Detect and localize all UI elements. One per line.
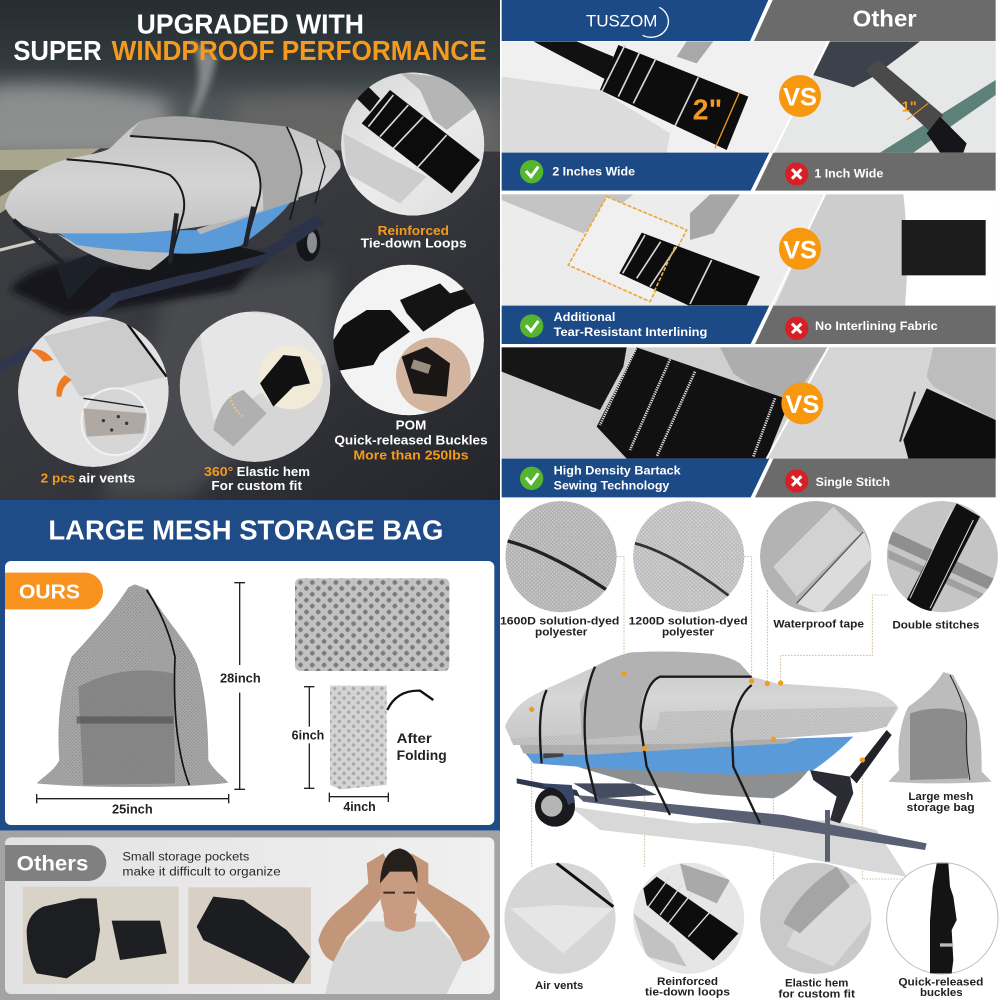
row 3 captions: Single Stitch [816, 475, 890, 489]
white diagonal dividers [767, 41, 828, 459]
caption: elastic hem: For custom fit [211, 479, 303, 493]
title: WINDPROOF PERFORMANCE [112, 35, 487, 66]
shadow and boat on trailer [505, 652, 927, 877]
caption: elastic hem: Elastic hem [237, 465, 310, 479]
caption: 1600D polyester: polyester [535, 627, 588, 639]
frustrated man [318, 848, 490, 994]
caption: tie-down loops: Tie-down Loops [361, 236, 467, 250]
panel: others [5, 837, 494, 994]
others note: make it difficult to organize [122, 865, 281, 879]
dimension: height 28inch [220, 583, 261, 789]
caption: tie-down loops: Reinforced [378, 224, 449, 238]
vs badge 2: VS [783, 236, 817, 264]
row 2 captions [502, 306, 996, 344]
caption: tie-down loops [645, 976, 730, 999]
caption: elastic hem [204, 465, 310, 493]
comparison header: TUSZOM [586, 12, 657, 31]
caption: waterproof tape: Waterproof tape [773, 618, 864, 630]
gray background [0, 831, 500, 1000]
caption: elastic hem: for custom fit [778, 988, 855, 1000]
caption: elastic hem [778, 978, 855, 1000]
detail: 1600D polyester [503, 501, 617, 612]
caption: tie-down loops: tie-down loops [645, 987, 730, 999]
caption: 1200D polyester [629, 615, 748, 639]
others tab: Others [17, 852, 88, 876]
dimension: height 6inch: 6inch [292, 728, 324, 742]
caption: double stitches: Double stitches [892, 620, 979, 632]
row 2 captions: Additional [554, 310, 615, 324]
row 1 captions [502, 153, 996, 191]
caption: air vents: Air vents [535, 980, 583, 992]
boat on trailer [0, 116, 341, 372]
vs badge 1 [779, 75, 821, 117]
title [13, 8, 487, 66]
caption: air vents: 2 pcs [41, 471, 75, 485]
leader lines [532, 557, 903, 880]
caption: tie-down loops: Reinforced [657, 976, 718, 988]
after folding note: Folding [397, 747, 447, 763]
caption: 1600D polyester: 1600D solution-dyed [500, 615, 619, 627]
dimension: width 25inch: 25inch [112, 802, 153, 816]
vs badge 3: VS [785, 391, 819, 419]
dimension: width 4inch: 4inch [343, 800, 376, 814]
photo: rolled cover [188, 887, 311, 984]
detail: buckles [333, 265, 484, 415]
row 1: strap width: 2" [693, 94, 722, 126]
row 2 captions: No Interlining Fabric [815, 319, 938, 333]
detail: tie-down loops [341, 72, 487, 216]
folded pouch [330, 686, 433, 789]
blue background [0, 500, 500, 831]
vs badge 2 [779, 228, 821, 270]
comparison header [502, 0, 996, 41]
row 1 captions: 1 Inch Wide [814, 167, 883, 181]
vs badge 1: VS [783, 84, 817, 112]
caption: elastic hem: Elastic hem [785, 978, 848, 990]
panel: product features [500, 501, 998, 1000]
row 3 captions: Sewing Technology [554, 479, 669, 493]
caption: 1200D polyester: polyester [662, 627, 715, 639]
mesh close-up [295, 578, 449, 671]
caption: mesh bag: storage bag [907, 802, 975, 814]
background: stormy sky and road [0, 0, 500, 500]
detail: air vents [504, 863, 616, 974]
comparison header: Other [853, 6, 917, 32]
caption: buckles: Quick-released Buckles [334, 433, 488, 447]
caption: quick-released buckles [898, 977, 983, 999]
others note: Small storage pockets [122, 850, 249, 864]
dimension: width 25inch [37, 794, 229, 816]
panel: comparison with other [502, 0, 996, 498]
dimension: width 4inch [329, 793, 388, 814]
vs badge 3 [781, 382, 823, 424]
caption: air vents: air vents [79, 471, 135, 485]
panel: ours [5, 561, 494, 825]
detail: elastic hem [760, 863, 872, 974]
photo: small pouches [23, 887, 179, 984]
row 3 captions [502, 459, 996, 497]
row 1: strap width [502, 41, 996, 153]
after folding note [397, 730, 447, 763]
caption: tie-down loops [361, 224, 467, 250]
detail: air vents [18, 316, 169, 467]
row 1 captions: 2 Inches Wide [552, 165, 635, 179]
caption: air vents [41, 471, 135, 485]
caption: buckles [334, 418, 488, 462]
title: UPGRADED WITH [137, 8, 364, 39]
row 1: strap width: 1" [902, 100, 917, 116]
caption: buckles: POM [396, 418, 426, 432]
dimension: height 6inch [292, 687, 324, 788]
caption: elastic hem: 360° [204, 465, 233, 479]
ours tab: OURS [19, 580, 80, 603]
after folding note: After [397, 730, 432, 746]
row 2: interlining [502, 194, 996, 306]
caption: buckles: More than 250lbs [353, 448, 469, 462]
mesh bag [888, 672, 992, 783]
detail: quick-released buckles [887, 863, 998, 974]
title: LARGE MESH STORAGE BAG [48, 514, 443, 545]
others note [122, 850, 281, 879]
caption: 1600D polyester [500, 615, 619, 639]
caption: mesh bag: Large mesh [908, 791, 973, 803]
dimension: height 28inch: 28inch [220, 672, 261, 686]
row 3 captions: High Density Bartack [554, 464, 681, 478]
mesh bag [37, 584, 228, 787]
caption: quick-released buckles: buckles [920, 987, 963, 999]
panel: large mesh storage bag [0, 500, 500, 1000]
detail: waterproof tape [760, 501, 873, 613]
detail: elastic hem [180, 310, 330, 462]
caption: quick-released buckles: Quick-released [898, 977, 983, 989]
caption: mesh bag [907, 791, 975, 814]
caption: 1200D polyester: 1200D solution-dyed [629, 615, 748, 627]
detail: double stitches [887, 501, 998, 613]
detail: tie-down loops [633, 863, 744, 974]
row 3: stitching [502, 347, 996, 459]
row 2 captions: Tear-Resistant Interlining [554, 325, 707, 339]
detail: 1200D polyester [633, 501, 744, 612]
panel: upgraded windproof performance [0, 0, 500, 500]
title: SUPER [13, 35, 102, 66]
ours tab [5, 573, 103, 609]
others tab [5, 845, 106, 881]
